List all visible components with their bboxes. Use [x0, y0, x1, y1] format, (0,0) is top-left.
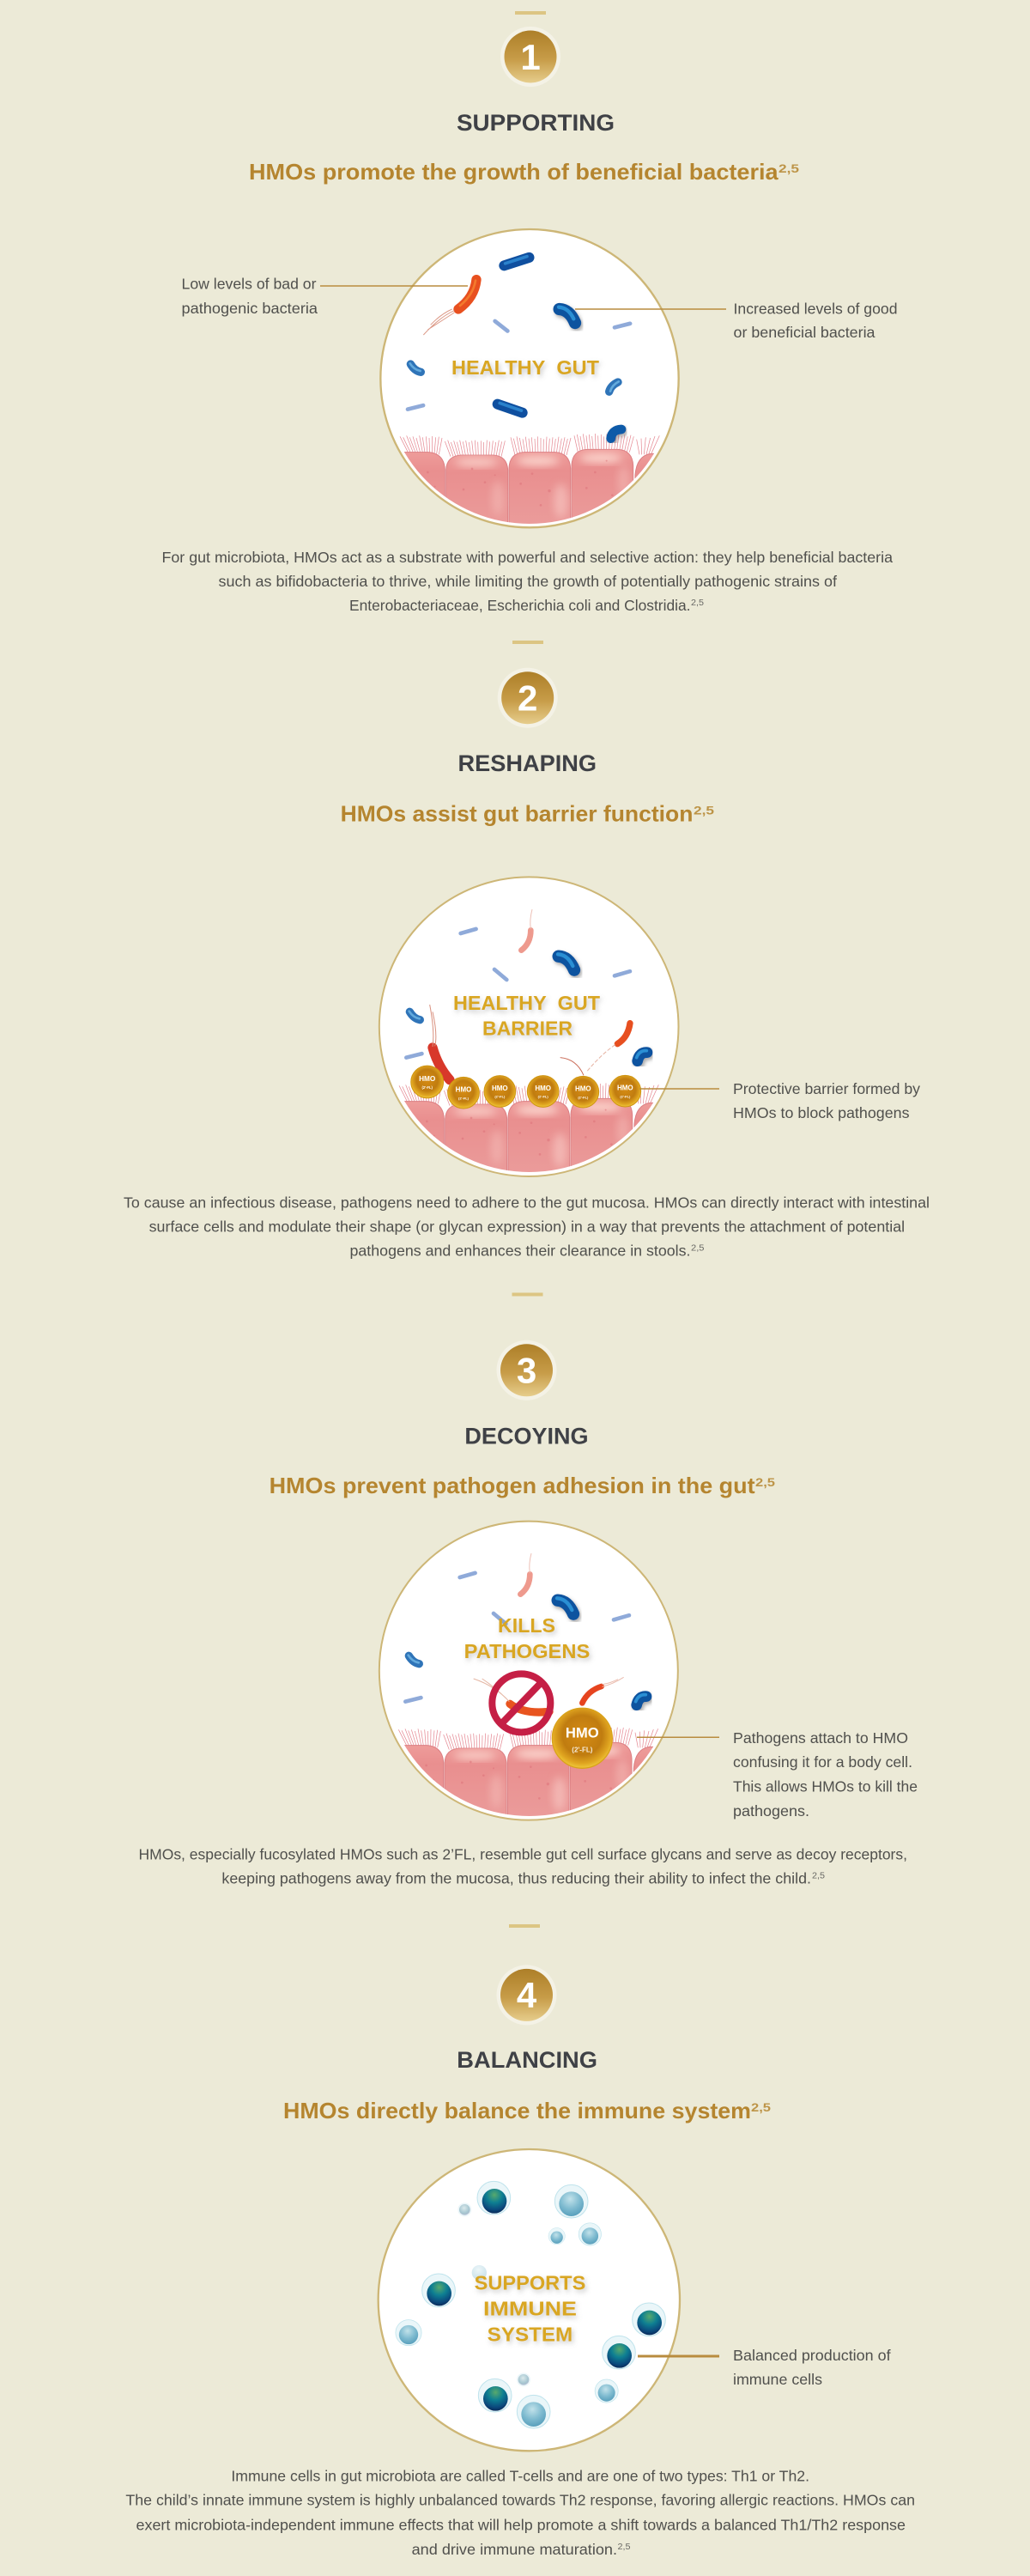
body text: keeping pathogens away from the mucosa, thus reducing their ability to infect the child. — [221, 1870, 811, 1887]
illustration circle: kills pathogens — [379, 1522, 678, 1820]
number badge 4 — [496, 1965, 556, 2025]
callout: balanced production: Balanced production of — [733, 2347, 891, 2364]
callout: balanced production: immune cells — [733, 2371, 822, 2388]
subheading: HMOs prevent pathogen adhesion in the gut — [270, 1473, 755, 1498]
number badge 1: 1 — [520, 37, 541, 77]
bacteria — [405, 1553, 646, 1712]
body text: and drive immune maturation. — [412, 2541, 617, 2558]
subheading: 2,5 — [751, 2100, 771, 2114]
immune cells — [396, 2181, 665, 2428]
body text: Enterobacteriaceae, Escherichia coli and Clostridia. — [349, 597, 690, 614]
body text — [124, 1194, 930, 1260]
caption: healthy gut barrier — [453, 992, 600, 1040]
callout: good bacteria: Increased levels of good — [733, 301, 898, 318]
callout: good bacteria — [575, 301, 898, 341]
caption: supports immune system: SUPPORTS — [475, 2272, 585, 2294]
caption: supports immune system — [475, 2272, 585, 2346]
caption: kills pathogens: PATHOGENS — [464, 1640, 590, 1662]
prohibition sign — [492, 1674, 550, 1732]
body text: Immune cells in gut microbiota are called T-cells and are one of two types: Th1 or Th2. — [231, 2468, 809, 2485]
section 1: supporting — [161, 11, 898, 614]
section 4: balancing — [125, 1924, 915, 2558]
body text: The child’s innate immune system is highly unbalanced towards Th2 response, favoring allergic reactions. HMOs can — [125, 2492, 915, 2509]
bacteria — [406, 909, 647, 1080]
HMO molecule — [552, 1708, 612, 1768]
callout: pathogens attach: pathogens. — [733, 1802, 809, 1820]
section 3: decoying — [139, 1293, 918, 1887]
heading: balancing: BALANCING — [457, 2047, 597, 2073]
number badge 3 — [496, 1340, 556, 1400]
subheading: 2,5 — [694, 804, 714, 817]
callout: bad bacteria: Low levels of bad or — [182, 275, 317, 292]
heading: supporting: SUPPORTING — [457, 110, 615, 136]
illustration circle: immune system — [379, 2149, 680, 2451]
number badge 2 — [498, 668, 558, 728]
caption: healthy gut: HEALTHY GUT — [451, 356, 599, 379]
callout: pathogens attach: Pathogens attach to HMO — [733, 1729, 908, 1747]
body text: To cause an infectious disease, pathogens need to adhere to the gut mucosa. HMOs can directly interact with intestinal — [124, 1194, 930, 1211]
body text: For gut microbiota, HMOs act as a substrate with powerful and selective action: they help beneficial bacteria — [161, 549, 893, 566]
callout: balanced production — [638, 2347, 891, 2388]
subheading: HMOs directly balance the immune system — [283, 2098, 751, 2123]
callout: bad bacteria — [182, 275, 468, 317]
gut cells — [394, 1083, 671, 1176]
body text: 2,5 — [812, 1872, 825, 1881]
body text: HMOs, especially fucosylated HMOs such as 2’FL, resemble gut cell surface glycans and serve as decoy receptors, — [139, 1845, 907, 1862]
caption: supports immune system: SYSTEM — [488, 2324, 573, 2346]
body text: 2,5 — [691, 1244, 705, 1254]
callout: pathogens attach — [637, 1729, 918, 1820]
heading: decoying: DECOYING — [464, 1424, 589, 1449]
illustration circle: healthy gut — [380, 229, 679, 527]
callout: protective barrier — [639, 1080, 920, 1121]
body text: 2,5 — [618, 2543, 631, 2552]
callout: pathogens attach: This allows HMOs to kill the — [733, 1777, 918, 1795]
callout: protective barrier: Protective barrier formed by — [733, 1080, 920, 1097]
caption: healthy gut barrier: HEALTHY GUT — [453, 992, 600, 1014]
body text: surface cells and modulate their shape (or glycan expression) in a way that prevents the attachment of potential — [149, 1218, 905, 1236]
subheading: 2,5 — [779, 161, 799, 175]
gut cells — [395, 434, 672, 526]
number badge 1 — [500, 27, 560, 87]
body text: 2,5 — [691, 598, 704, 608]
callout: protective barrier: HMOs to block pathogens — [733, 1104, 910, 1121]
caption: supports immune system: IMMUNE — [483, 2298, 577, 2320]
heading: reshaping: RESHAPING — [458, 750, 597, 776]
subheading: 2,5 — [755, 1475, 775, 1489]
section 2: reshaping — [124, 641, 930, 1260]
HMO molecule: (2'-FL) — [572, 1746, 593, 1753]
caption: kills pathogens: KILLS — [498, 1614, 555, 1637]
caption: kills pathogens — [464, 1614, 590, 1662]
subheading: HMOs assist gut barrier function — [341, 801, 693, 827]
callout: bad bacteria: pathogenic bacteria — [182, 300, 318, 317]
illustration circle: gut barrier — [379, 877, 678, 1176]
number badge 2: 2 — [518, 678, 537, 718]
body text — [139, 1845, 907, 1887]
number badge 4: 4 — [517, 1975, 537, 2015]
body text: such as bifidobacteria to thrive, while limiting the growth of potentially pathogenic strains of — [218, 573, 837, 590]
body text — [161, 549, 893, 614]
HMO molecule: HMO — [566, 1724, 599, 1741]
body text: pathogens and enhances their clearance in stools. — [350, 1242, 690, 1260]
gut cells — [398, 1728, 658, 1816]
body text — [125, 2468, 915, 2558]
callout: good bacteria: or beneficial bacteria — [733, 324, 876, 341]
bacteria — [408, 256, 630, 439]
body text: exert microbiota-independent immune effects that will help promote a shift towards a balanced Th1/Th2 response — [136, 2517, 906, 2534]
HMO barrier molecules — [411, 1066, 641, 1109]
caption: healthy gut barrier: BARRIER — [482, 1018, 573, 1040]
subheading: HMOs promote the growth of beneficial bacteria — [249, 159, 779, 185]
callout: pathogens attach: confusing it for a body cell. — [733, 1753, 912, 1771]
number badge 3: 3 — [517, 1350, 536, 1391]
